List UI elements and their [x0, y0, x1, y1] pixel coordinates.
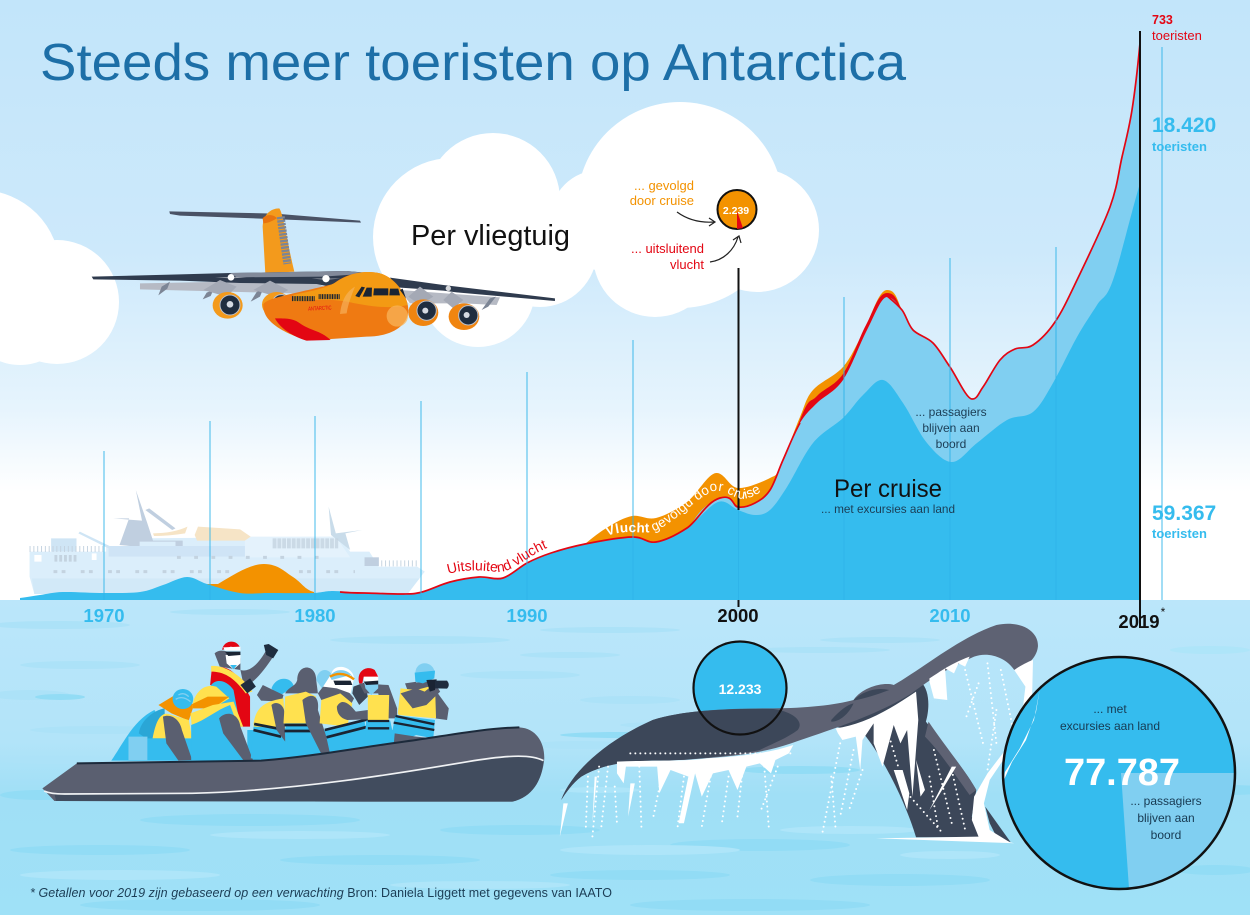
label: exclusively flight: ... uitsluitend	[631, 241, 704, 256]
pie outline	[1003, 657, 1235, 889]
label: followed by cruise: ... gevolgd	[634, 178, 694, 193]
pie: 2.239: 2.239	[723, 205, 749, 217]
passenger three	[251, 685, 292, 758]
label: with shore excursions: excursies aan land	[1060, 719, 1160, 733]
year axis labels: 2019	[1118, 611, 1160, 632]
year axis labels: 2000	[717, 605, 759, 626]
blue area: cruise with shore excursions	[20, 183, 1140, 600]
heading: per cruise	[821, 475, 955, 516]
label: stay on board: blijven aan	[1137, 811, 1195, 825]
airplane illustration	[92, 208, 555, 341]
tail fin	[263, 208, 294, 273]
passenger with blue hat	[147, 689, 194, 761]
wing right	[400, 290, 500, 305]
cruise ship silhouette	[30, 490, 425, 594]
highlight lines 2000 and 2019	[738, 31, 1140, 628]
bubble 2000: 12.233: 12.233	[719, 681, 762, 697]
year axis labels: 2010	[929, 605, 971, 626]
year axis labels: *	[1161, 605, 1166, 619]
tailplane	[169, 211, 361, 223]
passenger seven with camera	[391, 663, 449, 745]
callout: 2000 flight breakdown	[630, 178, 756, 272]
passenger five	[318, 667, 394, 753]
year axis labels	[83, 605, 1166, 632]
values 2019: 18.420: toeristen	[1152, 139, 1207, 154]
values 2019: 733 flight: 733	[1152, 13, 1173, 27]
year axis labels: 1980	[294, 605, 336, 626]
values 2019: 59.367: 59.367	[1152, 502, 1216, 525]
values 2019: 59.367	[1152, 502, 1216, 541]
values 2019: 733 flight	[1152, 13, 1202, 43]
label: followed by cruise: door cruise	[630, 193, 694, 208]
passenger four	[283, 667, 332, 757]
label: stay on board: ... passagiers	[1130, 794, 1202, 808]
curved label: exclusively flight: Uitsluitend vlucht	[447, 540, 548, 573]
orange area: flight followed by cruise	[207, 290, 902, 600]
flukes	[561, 624, 1038, 800]
heading: per cruise: Per cruise	[834, 475, 942, 503]
footnote and source: * Getallen voor 2019 zijn gebaseerd op een verwachting Bron: Daniela Liggett met gegevens van IAATO	[30, 886, 612, 900]
label: passengers stay on board: ... passagiers	[915, 405, 987, 419]
fuselage	[263, 272, 408, 341]
zodiac boat with tourists	[42, 642, 544, 802]
year gridlines	[104, 47, 1162, 600]
sky background	[0, 0, 1250, 600]
whale tail illustration	[560, 624, 1038, 843]
sea background	[0, 600, 1250, 915]
wing left	[140, 280, 333, 293]
year axis labels: 1970	[83, 605, 125, 626]
cloud middle	[373, 102, 819, 347]
values 2019: 733 flight: toeristen	[1152, 28, 1202, 43]
label: passengers stay on board: blijven aan	[922, 421, 980, 435]
passenger six	[359, 668, 397, 745]
bubble 2019: 77.787	[1003, 657, 1235, 889]
bubble 2000: 12.233	[694, 642, 786, 734]
cloud left	[0, 190, 119, 365]
wing glare	[215, 274, 451, 291]
values 2019: 59.367: toeristen	[1152, 526, 1207, 541]
light blue area: passengers stay on board	[690, 43, 1140, 600]
label: stay on board: boord	[1151, 828, 1181, 842]
water on flukes	[560, 657, 1033, 843]
engines	[213, 292, 479, 330]
red area: flight only	[780, 293, 902, 469]
label: exclusively flight: vlucht	[670, 257, 704, 272]
arrows	[677, 212, 741, 262]
label: passengers stay on board: boord	[936, 437, 966, 451]
year axis labels: 1990	[506, 605, 548, 626]
hull	[42, 727, 544, 802]
red line: exclusively flight	[340, 43, 1140, 594]
passenger with orange collar	[190, 686, 253, 761]
cockpit windows	[355, 287, 406, 298]
tail stock	[836, 682, 981, 837]
total: 77.787	[1064, 752, 1180, 794]
white splash over the bubble	[1003, 688, 1040, 782]
passenger windows	[292, 297, 340, 299]
values 2019: 18.420	[1152, 114, 1216, 154]
livery text: ANTARCTIC	[308, 305, 332, 313]
values 2019: 18.420: 18.420	[1152, 114, 1216, 137]
pie slice: passengers stay on board	[1121, 773, 1235, 888]
bubble outline 2000	[694, 642, 786, 734]
heading: per vliegtuig: Per vliegtuig	[411, 220, 570, 252]
curved label: flight followed by cruise: Vlucht gevolgd door cruise	[606, 484, 760, 535]
label: with shore excursions: ... met	[1093, 702, 1127, 716]
title: Steeds meer toeristen op Antarctica	[40, 34, 906, 92]
guide in red vest	[206, 642, 278, 727]
area chart: tourists by transport	[20, 31, 1162, 628]
pie background	[1003, 657, 1235, 889]
heading: per cruise: ... met excursies aan land	[821, 502, 955, 516]
back passenger shapes	[111, 710, 192, 761]
